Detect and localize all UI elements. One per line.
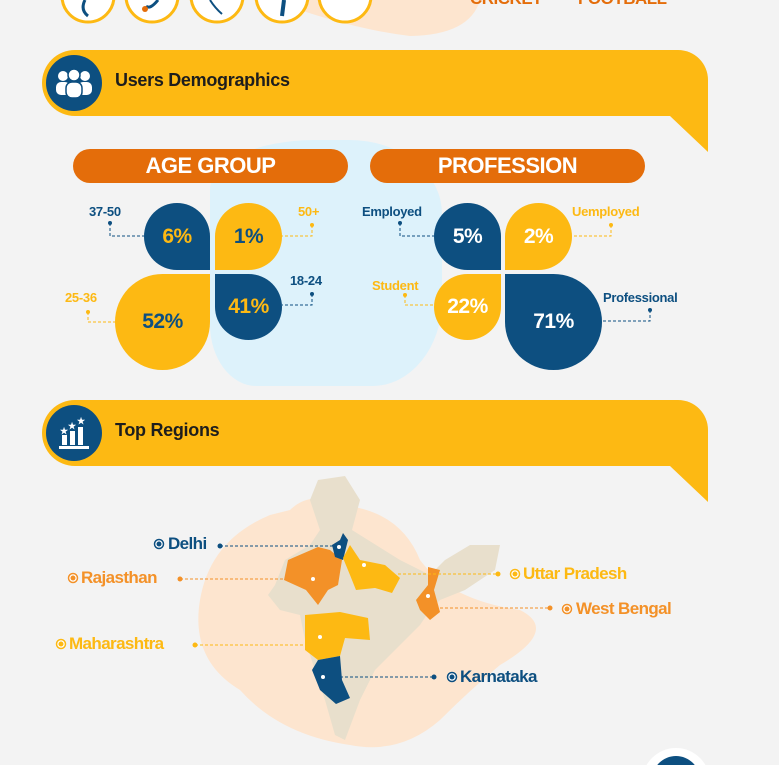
light blue blob [210,140,442,386]
text: Uemployed [572,204,639,219]
age petals [115,203,282,370]
petal 41%: 41% [228,295,269,318]
petal 52% [115,274,210,370]
bottom circle icon [647,748,705,765]
icon: chart stars: ★ [77,416,86,426]
age labels: 37-50 [89,204,121,219]
petal 1% [215,203,282,270]
heading: Users Demographics [115,70,290,90]
icon: chart stars [46,405,102,461]
Karnataka [312,656,350,704]
petal 41% [215,274,282,340]
UP [343,545,400,593]
text: 50+ [298,204,319,219]
region labels: Delhi [168,534,207,553]
petal 2%: 2% [524,224,553,248]
text: 18-24 [290,273,322,288]
Delhi [332,533,348,560]
heading: Top Regions [115,420,219,440]
text: Student [372,278,418,293]
text: Karnataka [460,667,537,686]
Maharashtra [305,612,370,660]
icon: chart stars: ★ [68,421,77,431]
banner: users demographics [42,50,708,116]
petal 5% [434,203,501,270]
pill: age group [73,149,348,183]
petal 71%: 71% [533,310,574,333]
profession labels: Employed [362,204,422,219]
petal 6%: 6% [162,224,192,248]
text: Maharashtra [69,634,164,653]
petal 6% [144,203,210,270]
pill: profession [370,149,645,183]
icon: chart stars: ★ [60,426,69,436]
petal 22%: 22% [447,295,488,318]
profession petals [434,203,602,370]
petal 1%: 1% [234,224,263,248]
icon: users [46,55,102,111]
text: West Bengal [576,599,671,618]
petal 22% [434,274,501,340]
banner: top regions [42,400,708,466]
pill: profession: PROFESSION [438,153,577,178]
WB [416,567,440,620]
petal 2% [505,203,572,270]
text: 25-36 [65,290,97,305]
petal 52%: 52% [142,310,183,333]
top partial section [60,0,667,36]
text: Uttar Pradesh [523,564,627,583]
petal 71% [505,274,602,370]
text: Rajasthan [81,568,157,587]
petal 5%: 5% [453,224,482,248]
map [56,476,572,748]
text: Professional [603,290,677,305]
Rajasthan [284,547,342,605]
pill: age group: AGE GROUP [146,153,275,178]
